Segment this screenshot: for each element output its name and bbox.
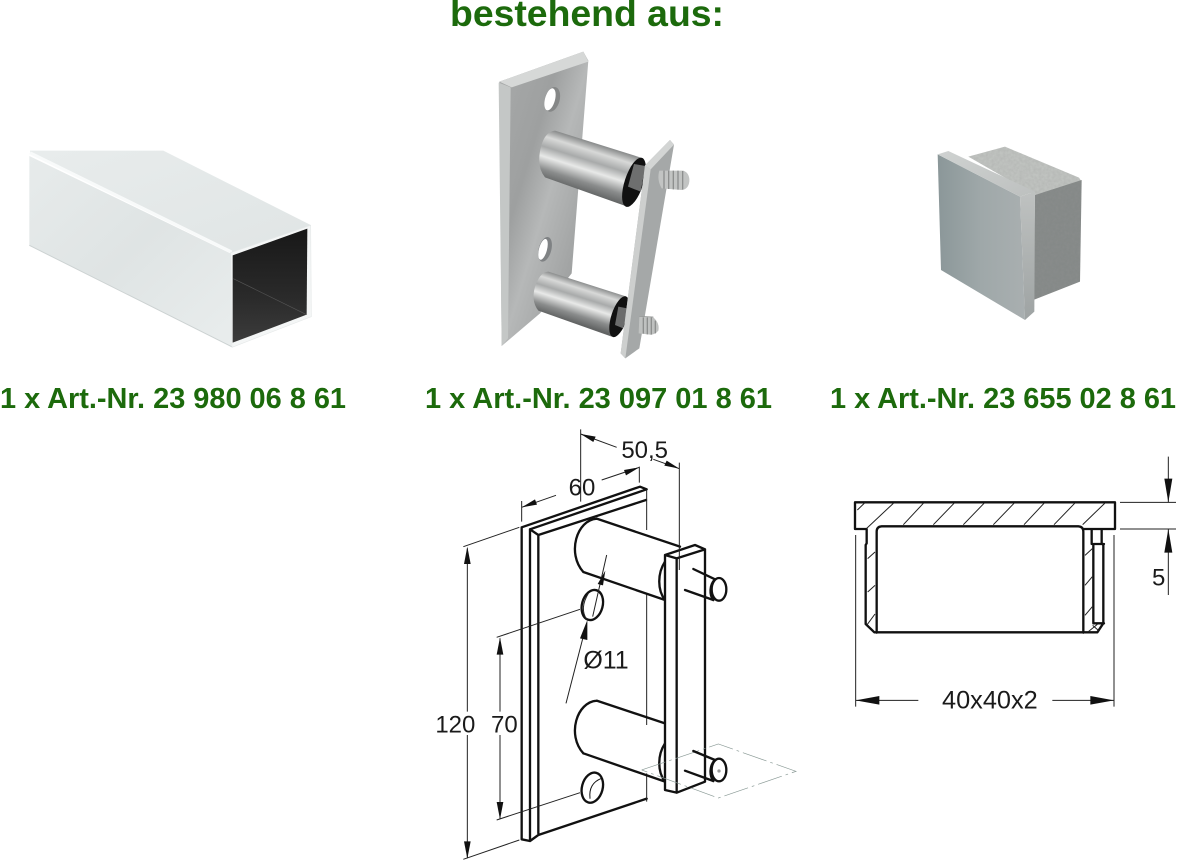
article number 3: 1 x Art.-Nr. 23 655 02 8 61 xyxy=(830,383,1176,415)
bracket small plate xyxy=(621,140,674,358)
dimension 50,5: 50,5 xyxy=(621,437,668,464)
product photo: square tube xyxy=(29,151,311,347)
upper pin xyxy=(685,569,726,601)
dimension 50,5 xyxy=(581,429,679,570)
upper hole xyxy=(578,555,607,622)
product photo: wall bracket xyxy=(499,52,689,358)
technical drawing: end cap section xyxy=(855,457,1176,715)
bracket threaded pins xyxy=(639,171,689,335)
product photo: end cap xyxy=(938,147,1082,320)
bracket holes xyxy=(542,85,563,113)
dimension 40x40x2: 40x40x2 xyxy=(942,687,1038,715)
dimension diameter 11: Ø11 xyxy=(583,647,629,675)
bracket wall plate xyxy=(499,52,588,346)
plate outline xyxy=(522,487,647,841)
dimension 70 xyxy=(491,609,580,820)
bracket spacer lower xyxy=(533,272,634,339)
dimension 120: 120 xyxy=(435,712,475,739)
front plate xyxy=(665,545,705,793)
technical drawing: bracket with dimensions xyxy=(435,429,796,859)
article number 1: 1 x Art.-Nr. 23 980 06 8 61 xyxy=(0,383,346,415)
tube side face xyxy=(29,156,232,347)
upper spacer xyxy=(575,519,680,600)
lower spacer xyxy=(575,701,665,782)
tube top face xyxy=(30,151,311,253)
dimension diameter 11 xyxy=(566,571,629,703)
cap body xyxy=(968,147,1082,300)
lower hole xyxy=(578,770,606,805)
cap hatching xyxy=(857,503,1105,632)
dimension 60 xyxy=(522,467,639,522)
tube open end xyxy=(231,225,311,347)
dimension 70: 70 xyxy=(491,712,518,739)
article number 2: 1 x Art.-Nr. 23 097 01 8 61 xyxy=(425,383,772,415)
dimension 120 xyxy=(435,527,519,859)
dimension 5 xyxy=(1120,457,1176,595)
cap flange xyxy=(938,154,1025,320)
lower pin with projection xyxy=(642,744,796,798)
dimension 5: 5 xyxy=(1152,565,1165,592)
dimension 60: 60 xyxy=(569,475,595,502)
bracket spacer upper xyxy=(539,131,651,210)
dimension 40x40x2 xyxy=(856,535,1114,715)
cap section outline xyxy=(855,502,1115,633)
